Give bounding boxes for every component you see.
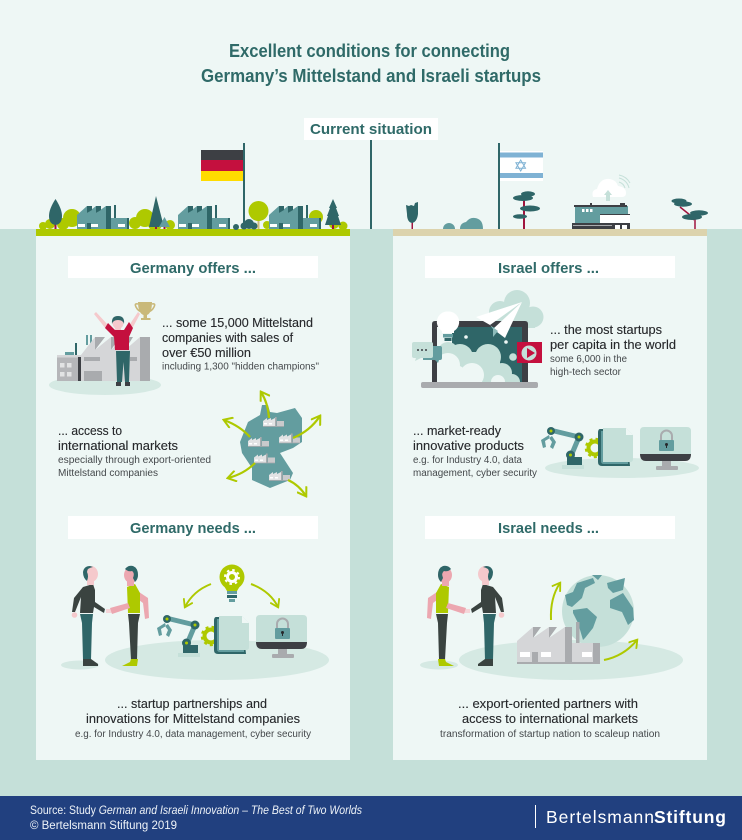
illustration: robot, data and security [541, 427, 699, 478]
text: market-ready innovative products: innovative products [413, 439, 524, 453]
sand ground strip [393, 229, 707, 236]
text: access to international markets: especially through export-oriented [58, 455, 211, 466]
speech bubbles [412, 342, 442, 363]
acacia tree [672, 198, 708, 229]
dark shrubs [233, 219, 258, 230]
robot, data and security [157, 615, 307, 658]
pine tree [513, 191, 540, 229]
building with cloud upload [572, 175, 630, 229]
green ground strip [36, 229, 350, 236]
text: most startups per capita: per capita in the world [550, 338, 676, 352]
text: 15,000 Mittelstand companies: companies with sales of [162, 331, 294, 345]
German flag [201, 143, 245, 229]
heading: Israel needs [425, 516, 675, 539]
text: export-oriented partners: transformation of startup nation to scaleup nation [440, 729, 660, 740]
heading: Germany offers [68, 256, 318, 278]
text: startup partnerships: ... startup partnerships and [117, 697, 267, 711]
video play box [517, 342, 542, 363]
person [94, 312, 140, 386]
shrubs [443, 218, 483, 229]
tree left [49, 199, 62, 229]
factories [77, 205, 321, 229]
ground background [0, 229, 742, 796]
paper plane [476, 302, 522, 338]
text: startup partnerships: innovations for Mittelstand companies [86, 712, 300, 726]
illustration: Israeli partnership [420, 566, 683, 680]
text: startup partnerships: e.g. for Industry 4.0, data management, cyber security [75, 729, 311, 740]
title [201, 41, 541, 86]
Israel landscape [393, 143, 708, 236]
source text: Source: Study German and Israeli Innovation – The Best of Two Worlds [30, 805, 362, 817]
arrows from idea [185, 584, 278, 607]
text: export-oriented partners: ... export-oriented partners with [458, 697, 638, 711]
source text: © Bertelsmann Stiftung 2019 [30, 820, 177, 832]
bushes [39, 209, 348, 231]
illustration: German partnership [61, 564, 329, 680]
cypress tree [406, 202, 418, 229]
logo: Bertelsmann Stiftung: Stiftung [654, 807, 726, 827]
text: export-oriented partners [440, 697, 660, 740]
idea bulb with gear [220, 564, 244, 602]
panel: Germany [36, 229, 350, 760]
spruce tree [149, 196, 170, 229]
trophy [135, 302, 155, 320]
text: most startups per capita: ... the most startups [550, 323, 662, 337]
heading: Germany needs [68, 516, 318, 539]
heading: current situation [304, 118, 438, 140]
handshake figures [72, 566, 149, 666]
text: 15,000 Mittelstand companies: including 1,300 "hidden champions" [162, 362, 320, 372]
illustration: champion and factory [49, 302, 161, 395]
text: access to international markets: ... access to [58, 424, 122, 438]
text: most startups per capita: high-tech sector [550, 367, 622, 378]
source text [30, 805, 362, 832]
spruce right [325, 199, 341, 229]
text: 15,000 Mittelstand companies: ... some 15,000 Mittelstand [162, 316, 313, 330]
globe [562, 575, 634, 647]
heading: current situation: Current situation [310, 121, 432, 138]
round tree [248, 201, 268, 229]
text: most startups per capita: some 6,000 in the [550, 354, 628, 365]
text: export-oriented partners: access to international markets [462, 712, 638, 726]
footer [0, 796, 742, 840]
illustration: startup laptop [412, 290, 544, 391]
heading: Israel offers: Israel offers ... [498, 260, 599, 277]
grey factory [517, 622, 600, 664]
text: startup partnerships [75, 697, 311, 740]
heading: Israel offers [425, 256, 675, 278]
Israeli flag [498, 143, 543, 229]
text: market-ready innovative products: management, cyber security [413, 468, 537, 479]
heading: Germany offers: Germany offers ... [130, 260, 256, 277]
centre divider pole [370, 140, 372, 229]
text: access to international markets [58, 424, 211, 479]
text: market-ready innovative products [413, 424, 537, 479]
logo: Bertelsmann Stiftung: Bertelsmann [546, 807, 654, 827]
export arrows [551, 583, 637, 660]
text: market-ready innovative products: e.g. for Industry 4.0, data [413, 455, 523, 466]
handshake figures [427, 566, 504, 666]
text: 15,000 Mittelstand companies: over €50 million [162, 346, 251, 360]
background sky [0, 0, 742, 229]
text: access to international markets: international markets [58, 439, 178, 453]
text: 15,000 Mittelstand companies [162, 316, 320, 372]
heading: Germany needs: Germany needs ... [130, 520, 256, 537]
title: Excellent conditions for connecting [229, 41, 510, 61]
panel: Israel [393, 229, 707, 760]
text: access to international markets: Mittelstand companies [58, 468, 158, 479]
Germany landscape [36, 143, 350, 236]
heading: Israel needs: Israel needs ... [498, 520, 599, 537]
title: Germany’s Mittelstand and Israeli startups [201, 66, 541, 86]
text: most startups per capita [550, 323, 676, 378]
map of Germany with export arrows [224, 392, 320, 496]
text: market-ready innovative products: ... market-ready [413, 424, 502, 438]
logo: Bertelsmann Stiftung [535, 805, 726, 828]
